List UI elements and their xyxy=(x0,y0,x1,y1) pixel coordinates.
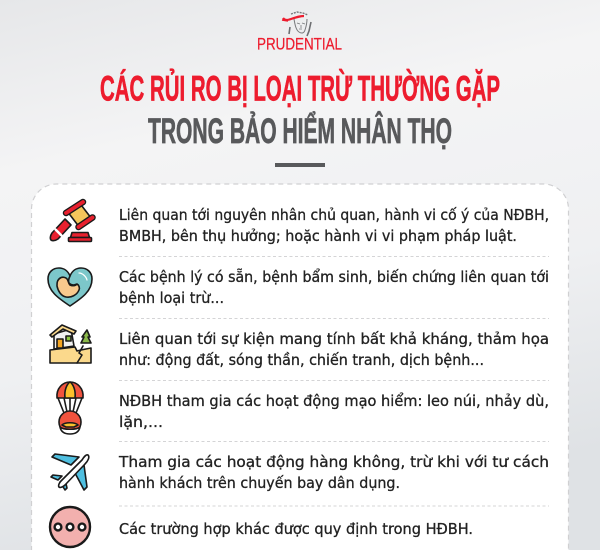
text: Các trường hợp khác được quy định trong HĐBH. xyxy=(119,520,473,538)
row 6: other xyxy=(50,507,473,547)
text: NĐBH tham gia các hoạt động mạo hiểm: leo núi, nhảy dù, xyxy=(119,392,549,410)
logo: Prudential xyxy=(257,12,342,54)
text: như: động đất, sóng thần, chiến tranh, dịch bệnh... xyxy=(119,351,484,369)
logo face sketch xyxy=(282,12,311,36)
text: Liên quan tới sự kiện mang tính bất khả kháng, thảm họa xyxy=(119,330,549,348)
panel: exclusions list xyxy=(32,184,568,550)
text: bệnh loại trừ... xyxy=(119,289,224,307)
panel background xyxy=(32,184,568,550)
text: lặn,... xyxy=(119,413,163,431)
icon: parachute xyxy=(57,382,83,434)
row 4: parachute xyxy=(57,382,549,434)
icon: three dots xyxy=(50,507,90,547)
text xyxy=(119,206,549,245)
icon: gavel xyxy=(50,202,92,242)
text xyxy=(119,268,549,307)
row 5: plane xyxy=(51,453,549,492)
text xyxy=(119,392,549,431)
row 2: heart xyxy=(48,268,549,307)
icon: airplane xyxy=(51,454,89,490)
text: BMBH, bên thụ hưởng; hoặc hành vi vi phạm pháp luật. xyxy=(119,227,517,245)
row 3: earthquake xyxy=(50,325,549,369)
text xyxy=(119,330,549,369)
title xyxy=(100,68,500,151)
icon: heart with fetus xyxy=(48,268,92,306)
text: Tham gia các hoạt động hàng không, trừ khi với tư cách xyxy=(118,453,549,471)
icon: house on cracked ground xyxy=(50,325,91,363)
row 1: gavel xyxy=(50,202,549,245)
text: Liên quan tới nguyên nhân chủ quan, hành vi cố ý của NĐBH, xyxy=(119,206,549,224)
text: Các bệnh lý có sẵn, bệnh bẩm sinh, biến chứng liên quan tới xyxy=(119,268,549,286)
logo wordmark: PRUDENTIAL xyxy=(257,36,342,54)
text: hành khách trên chuyến bay dân dụng. xyxy=(119,474,400,492)
text xyxy=(118,453,549,492)
title underline rule xyxy=(275,163,325,167)
